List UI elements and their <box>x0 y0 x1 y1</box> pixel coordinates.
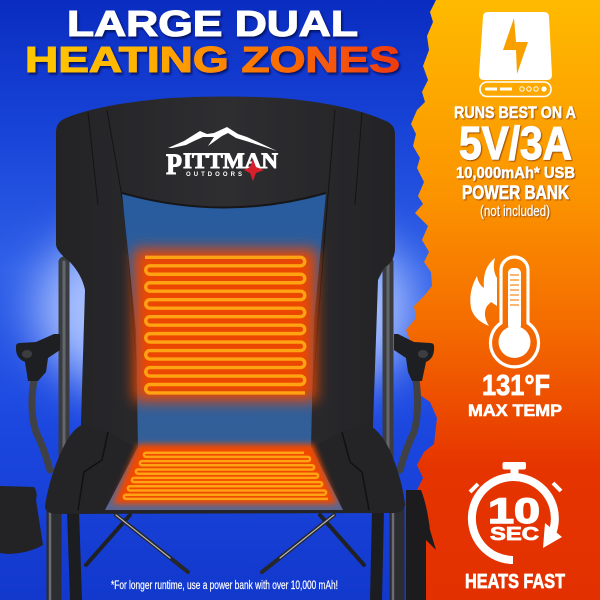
cup holder <box>0 486 43 554</box>
heating coil: seat <box>124 453 328 499</box>
title line one: LARGE DUAL <box>67 3 358 44</box>
text: 131F: 131°F <box>482 370 550 402</box>
power bank text <box>454 103 576 220</box>
icon: stopwatch <box>470 462 562 560</box>
frame legs <box>32 262 418 600</box>
logo letter P: P <box>166 148 182 181</box>
brand logo <box>166 127 278 181</box>
chair <box>0 96 436 600</box>
text: 10: 10 <box>488 492 540 531</box>
logo star <box>244 159 264 181</box>
armrest left <box>16 334 60 381</box>
title <box>25 3 400 80</box>
torn heat gradient panel <box>406 0 600 600</box>
heat glow: seat <box>113 444 337 504</box>
heating coil: back <box>145 257 305 393</box>
logo mountains <box>168 127 277 151</box>
logo subline: OUTDOORS <box>186 172 242 178</box>
text: heats fast: HEATS FAST <box>465 571 565 593</box>
seat cushion <box>45 424 405 514</box>
logo wordmark: ITTMAN <box>183 148 278 173</box>
text: runs best: RUNS BEST ON A <box>454 103 576 122</box>
backrest <box>56 96 395 455</box>
blue centre panel <box>122 193 326 447</box>
armrest right <box>394 334 434 381</box>
title line two: HEATING ZONES <box>25 39 400 80</box>
text: max temp: MAX TEMP <box>468 401 562 420</box>
backrest seams <box>88 110 362 400</box>
seat panel <box>105 447 343 510</box>
text: not included: (not included) <box>480 203 550 220</box>
seat cushion seams <box>78 432 369 510</box>
text: power bank: POWER BANK <box>462 183 569 204</box>
heat glow: back <box>134 249 316 401</box>
icon: power bank <box>479 12 552 96</box>
headrest seam <box>122 193 326 208</box>
text: 5V/3A: 5V/3A <box>459 117 572 169</box>
side pocket <box>406 490 436 600</box>
text: sec: SEC <box>490 524 539 544</box>
footnote: *For longer runtime, use a power bank with over 10,000 mAh! <box>111 580 338 592</box>
text: capacity: 10,000mAh* USB <box>456 165 575 182</box>
icon: thermometer with flame <box>470 257 538 367</box>
